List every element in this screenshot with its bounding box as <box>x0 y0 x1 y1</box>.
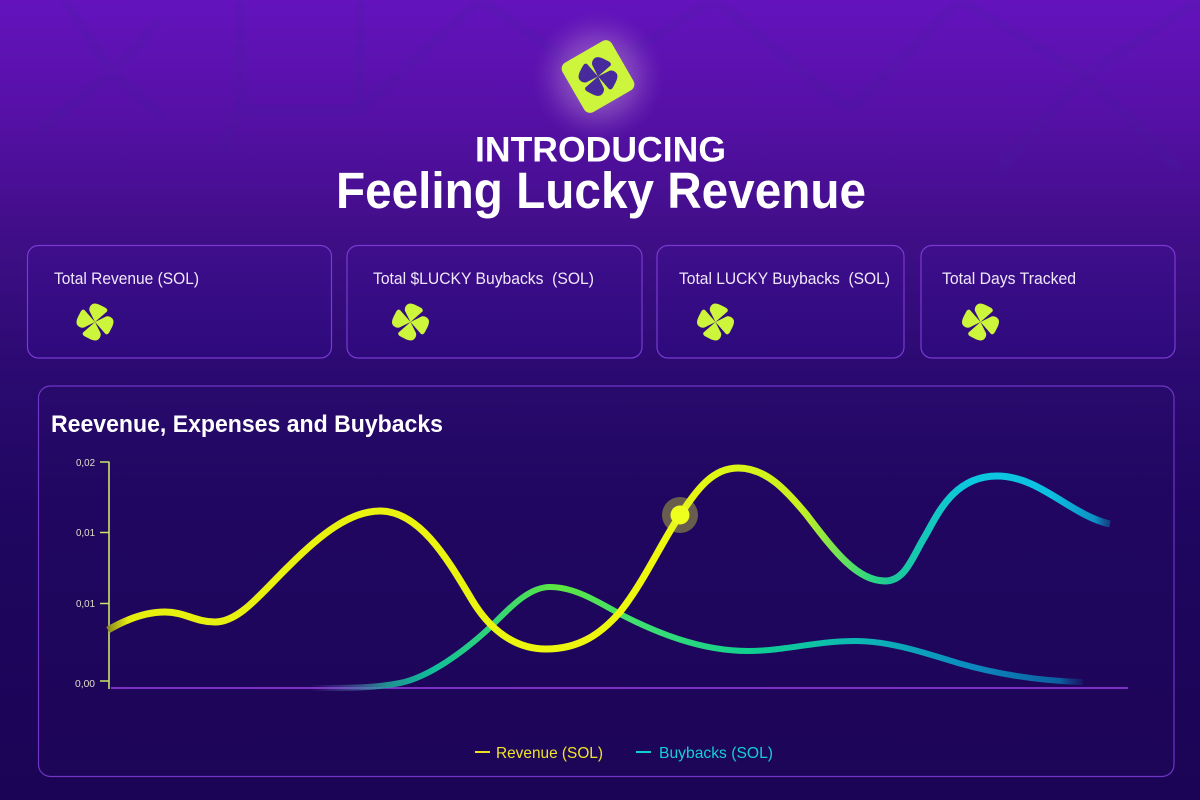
y axis: 0,02 <box>76 458 95 469</box>
y axis: 0,00 <box>75 679 95 690</box>
panel: chart <box>38 386 1174 776</box>
title <box>336 130 866 219</box>
panel: total LUCKY buybacks <box>657 246 904 358</box>
y axis: 0,01 <box>76 599 95 610</box>
legend <box>475 745 773 762</box>
icon: clover <box>697 304 734 340</box>
panel: total days tracked <box>921 246 1175 358</box>
logo glow <box>532 11 664 143</box>
panel: total revenue: Total Revenue (SOL) <box>54 269 199 288</box>
icon: clover <box>76 304 114 340</box>
x axis <box>111 687 1128 689</box>
panel: total $LUCKY buybacks: Total $LUCKY Buybacks (SOL) <box>373 269 594 288</box>
icon: clover <box>392 304 429 340</box>
panel: total LUCKY buybacks: Total LUCKY Buybacks (SOL) <box>679 269 890 288</box>
legend: Buybacks (SOL) <box>659 745 773 762</box>
y axis: 0,01 <box>76 528 95 539</box>
panel: total days tracked: Total Days Tracked <box>942 269 1076 288</box>
icon: clover <box>962 304 999 340</box>
panel: total revenue <box>28 246 332 358</box>
panel: total $LUCKY buybacks <box>347 246 642 358</box>
line: revenue <box>108 468 1110 649</box>
title: INTRODUCING <box>475 130 726 170</box>
line: buybacks <box>310 587 1083 688</box>
data point marker <box>662 497 698 533</box>
legend: Revenue (SOL) <box>496 745 603 762</box>
icon: clover logo <box>559 38 637 115</box>
chart heading: Reevenue, Expenses and Buybacks <box>51 411 443 438</box>
title: Feeling Lucky Revenue <box>336 162 866 219</box>
y axis <box>75 458 109 690</box>
